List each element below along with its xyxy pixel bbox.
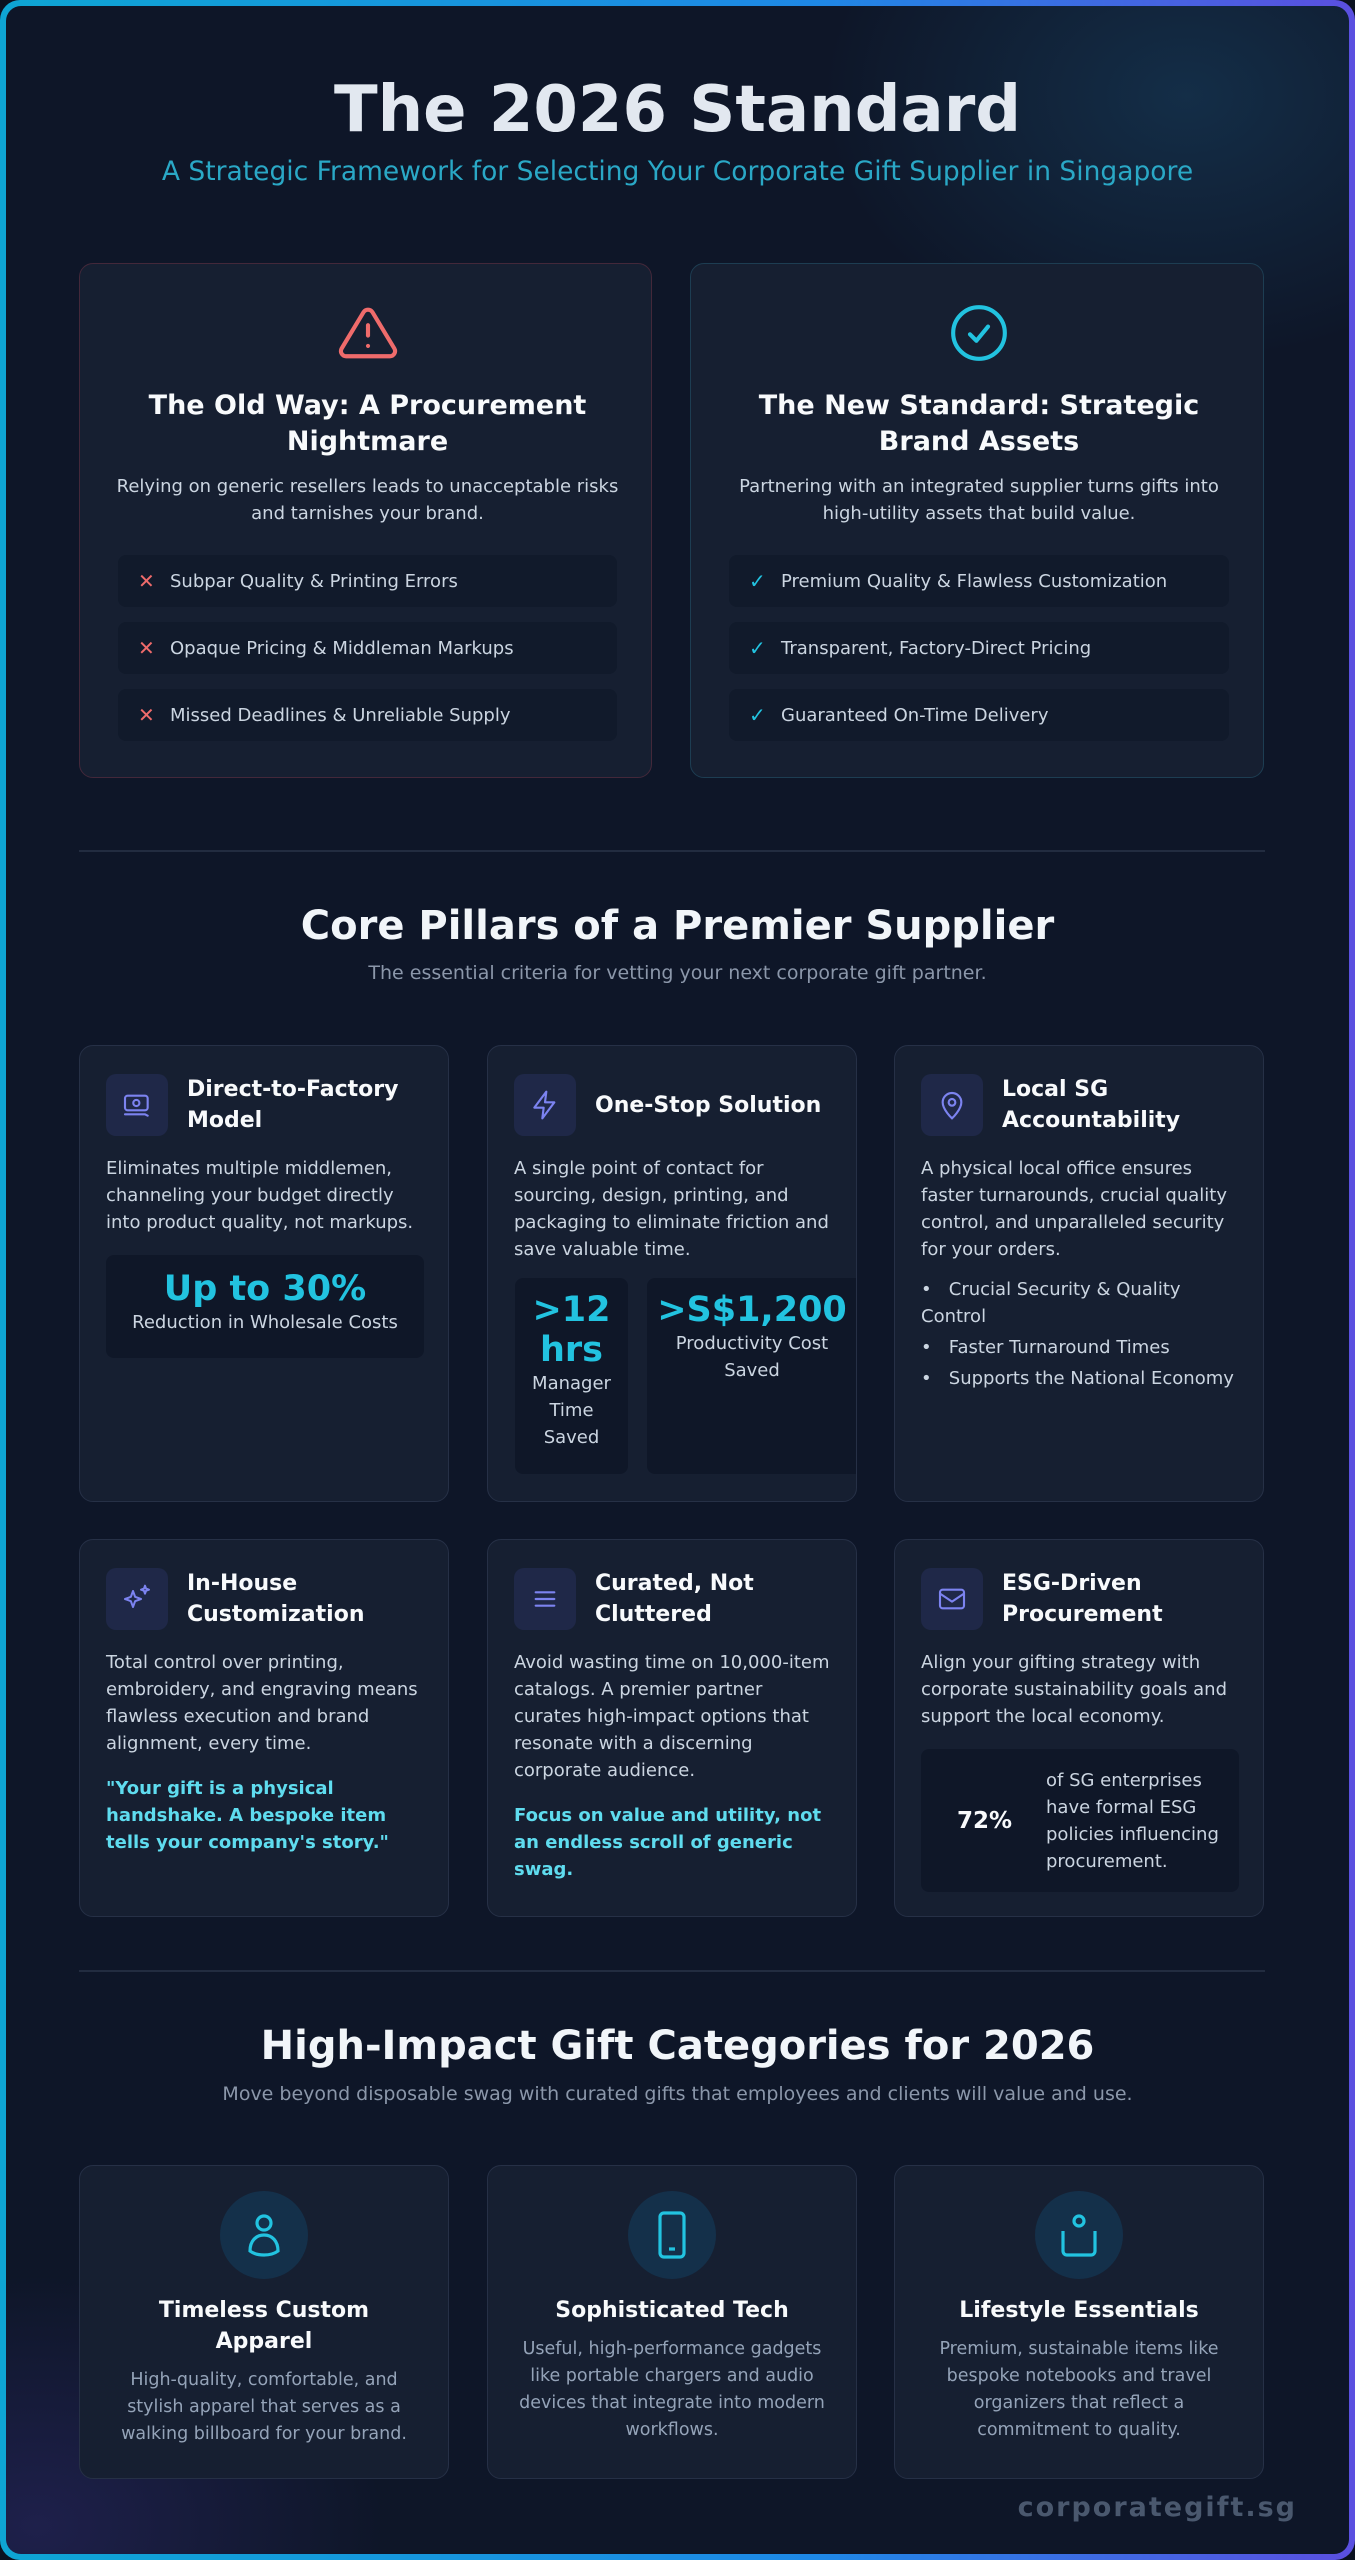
stat: S$1,200 <box>647 1278 877 1474</box>
list: new standard benefits: Premium Quality & Flawless Customization <box>781 570 1167 592</box>
text: new standard description: Partnering with an integrated supplier turns gifts into high-utility assets that build value. <box>739 476 1219 524</box>
panel: lifestyle <box>894 2165 1264 2479</box>
list: old way problems: ✕ <box>138 636 155 660</box>
panel: in-house customization <box>79 1539 449 1917</box>
panel: direct-to-factory: Eliminates multiple middlemen, channeling your budget directly into product quality, not markups. <box>106 1158 413 1233</box>
heading: old way: The Old Way: A Procurement Nightmare <box>149 390 586 457</box>
stat: 12 hrs: Manager <box>532 1373 611 1394</box>
stat: up to 30%: Up to 30% <box>164 1269 366 1309</box>
icon: phone <box>628 2191 716 2279</box>
icon: list <box>514 1568 576 1630</box>
list: old way problems: Missed Deadlines & Unreliable Supply <box>170 704 510 726</box>
icon: person <box>220 2191 308 2279</box>
subtitle: A Strategic Framework for Selecting Your Corporate Gift Supplier in Singapore <box>162 156 1193 187</box>
stat: 72% <box>921 1749 1239 1892</box>
panel: tech: Useful, high-performance gadgets like portable chargers and audio devices that integrate into modern workflows. <box>519 2339 825 2440</box>
heading: gift categories: High-Impact Gift Categories for 2026 <box>261 2023 1094 2069</box>
list: old way problems: Subpar Quality & Printing Errors <box>170 570 458 592</box>
icon: sparkles <box>106 1568 168 1630</box>
panel: one-stop solution <box>487 1045 857 1502</box>
list: new standard benefits: ✓ <box>749 636 766 660</box>
stat: 72%: of SG enterprises have formal ESG policies influencing procurement. <box>1046 1770 1219 1872</box>
panel: ESG: Align your gifting strategy with corporate sustainability goals and support the local economy. <box>921 1652 1227 1727</box>
panel: direct-to-factory: Direct-to-Factory Model <box>187 1077 398 1133</box>
panel: one-stop solution: One-Stop Solution <box>595 1092 821 1118</box>
heading: core pillars: Core Pillars of a Premier Supplier <box>301 903 1054 949</box>
stat: S$1,200: Saved <box>724 1360 780 1381</box>
list: local benefits: • Crucial Security & Quality Control <box>921 1279 1181 1327</box>
stat: 72%: 72% <box>957 1808 1012 1834</box>
stat: 12 hrs: Time <box>549 1400 594 1421</box>
stat: 12 hrs: Saved <box>544 1427 599 1448</box>
panel: lifestyle: Lifestyle Essentials <box>959 2298 1199 2323</box>
list: local benefits: • Faster Turnaround Times <box>921 1337 1170 1358</box>
panel: in-house customization: In-House Customization <box>187 1571 364 1627</box>
list: new standard benefits <box>749 569 1167 727</box>
callout: focus on value: Focus on value and utility, not an endless scroll of generic swag. <box>514 1805 821 1880</box>
stat: 12 hrs: hrs <box>540 1330 603 1370</box>
list: new standard benefits: Transparent, Factory-Direct Pricing <box>781 638 1091 658</box>
panel: curated <box>487 1539 857 1917</box>
stat: up to 30% <box>106 1255 424 1358</box>
panel: ESG: ESG-Driven Procurement <box>1002 1571 1163 1627</box>
list: new standard benefits: ✓ <box>749 569 766 593</box>
panel: curated: Curated, Not Cluttered <box>595 1571 754 1627</box>
panel: tech <box>487 2165 857 2479</box>
list: local benefits <box>921 1279 1234 1389</box>
panel: apparel: High-quality, comfortable, and stylish apparel that serves as a walking billboard for your brand. <box>121 2370 407 2444</box>
panel: direct-to-factory <box>79 1045 449 1502</box>
panel: old way <box>79 263 652 778</box>
title: The 2026 Standard <box>334 73 1021 147</box>
icon: envelope <box>921 1568 983 1630</box>
list: old way problems <box>138 569 514 727</box>
subtitle: core pillars: The essential criteria for vetting your next corporate gift partner. <box>368 962 987 984</box>
panel: one-stop solution: A single point of contact for sourcing, design, printing, and packaging to eliminate friction and save valuable time. <box>514 1158 829 1260</box>
icon: bag <box>1035 2191 1123 2279</box>
icon: warning <box>338 308 398 358</box>
list: old way problems: ✕ <box>138 569 155 593</box>
stat: S$1,200: Productivity Cost <box>676 1333 828 1354</box>
panel: apparel <box>79 2165 449 2479</box>
panel: in-house customization: Total control over printing, embroidery, and engraving means flawless execution and brand alignment, every time. <box>106 1652 418 1754</box>
quote: "Your gift is a physical handshake. A bespoke item tells your company's story." <box>106 1778 389 1853</box>
list: new standard benefits: Guaranteed On-Time Delivery <box>781 704 1048 726</box>
text: old way description: Relying on generic resellers leads to unacceptable risks and tarnishes your brand. <box>117 476 618 524</box>
icon: check circle <box>951 305 1007 361</box>
list: old way problems: ✕ <box>138 703 155 727</box>
stat: up to 30%: Reduction in Wholesale Costs <box>132 1312 398 1333</box>
panel: apparel: Timeless Custom Apparel <box>159 2298 369 2354</box>
panel: curated: Avoid wasting time on 10,000-item catalogs. A premier partner curates high-impact options that resonate with a discerning corporate audience. <box>514 1652 830 1781</box>
icon: location pin <box>921 1074 983 1136</box>
panel: new standard <box>690 263 1264 778</box>
heading: new standard: The New Standard: Strategic Brand Assets <box>759 390 1199 457</box>
panel: lifestyle: Premium, sustainable items like bespoke notebooks and travel organizers that reflect a commitment to quality. <box>939 2339 1219 2440</box>
list: old way problems: Opaque Pricing & Middleman Markups <box>170 638 514 658</box>
stat: S$1,200: >S$1,200 <box>657 1290 847 1330</box>
icon: lightning <box>514 1074 576 1136</box>
icon: money <box>106 1074 168 1136</box>
panel: local SG accountability: Local SG Accountability <box>1002 1077 1180 1133</box>
panel: ESG <box>894 1539 1264 1917</box>
footer: brand: corporategift.sg <box>1018 2492 1297 2523</box>
stat: 12 hrs <box>515 1278 628 1474</box>
panel: local SG accountability <box>894 1045 1264 1502</box>
panel: tech: Sophisticated Tech <box>555 2298 789 2323</box>
list: local benefits: • Supports the National Economy <box>921 1368 1234 1389</box>
list: new standard benefits: ✓ <box>749 703 766 727</box>
subtitle: gift categories: Move beyond disposable swag with curated gifts that employees and clients will value and use. <box>222 2083 1133 2105</box>
stat: 12 hrs: >12 <box>532 1290 611 1330</box>
panel: local SG accountability: A physical local office ensures faster turnarounds, crucial quality control, and unparalleled security for your orders. <box>921 1158 1227 1260</box>
